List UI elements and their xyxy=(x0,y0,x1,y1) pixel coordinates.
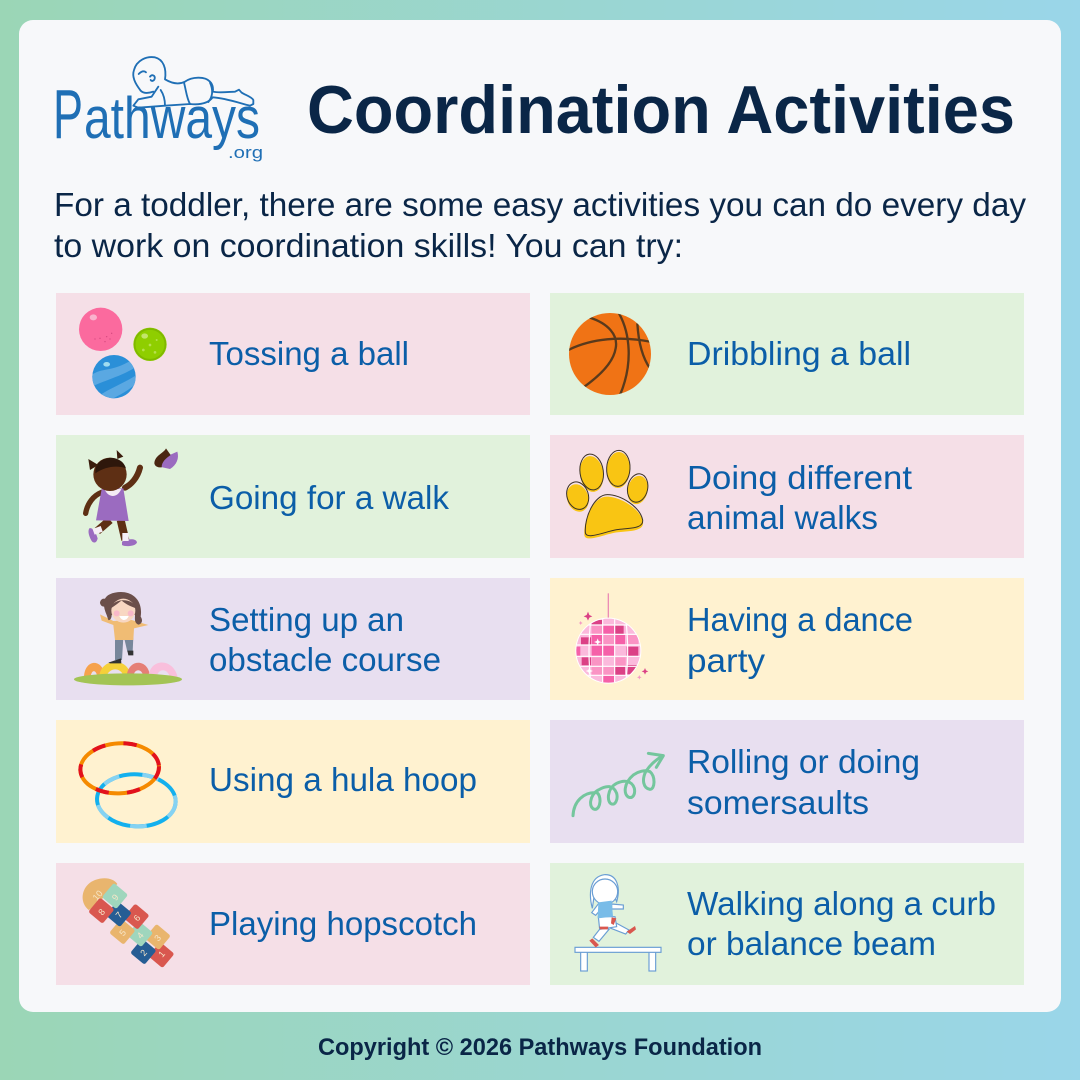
label xyxy=(209,601,441,678)
icon: girl on balance beam xyxy=(575,875,661,971)
footer copyright: Copyright © 2026 Pathways Foundation xyxy=(318,1034,762,1061)
card: dance party xyxy=(550,578,1024,700)
title: Coordination Activities xyxy=(307,72,1015,148)
label: Setting up an xyxy=(209,601,404,638)
icon: hopscotch: 7 xyxy=(114,910,124,920)
icon: hopscotch: 1 xyxy=(156,949,167,959)
label xyxy=(687,885,996,962)
logo: Pathways.org xyxy=(53,57,263,162)
card: hula hoop xyxy=(56,720,530,843)
label: or balance beam xyxy=(687,925,936,962)
label: Going for a walk xyxy=(209,479,449,516)
card: obstacle course xyxy=(56,578,530,700)
icon: disco ball xyxy=(575,593,648,685)
card: going for a walk xyxy=(56,435,530,558)
icon: spiral arrow xyxy=(573,753,663,816)
card: animal walks xyxy=(550,435,1024,558)
icon: two hula hoops xyxy=(79,741,177,828)
card: balance beam xyxy=(550,863,1024,985)
label: Dribbling a ball xyxy=(687,335,911,372)
label: Using a hula hoop xyxy=(209,761,477,798)
label: animal walks xyxy=(687,499,878,536)
label: Playing hopscotch xyxy=(209,905,477,942)
icon: hopscotch: 9 xyxy=(110,892,121,903)
icon: hopscotch: 5 xyxy=(117,928,128,938)
icon: hopscotch: 6 xyxy=(132,913,142,923)
icon: girl and butterfly xyxy=(86,448,178,546)
label: obstacle course xyxy=(209,641,441,678)
icon: hopscotch: 4 xyxy=(135,930,146,941)
label: Rolling or doing xyxy=(687,743,920,780)
label xyxy=(687,743,920,821)
label: Tossing a ball xyxy=(209,335,409,372)
icon: paw print xyxy=(563,450,650,538)
label: Walking along a curb xyxy=(687,885,996,922)
intro text: to work on coordination skills! You can try: xyxy=(54,227,683,264)
logo: Pathways.org: P xyxy=(53,75,83,153)
icon: hopscotch: 3 xyxy=(152,933,163,943)
intro text: For a toddler, there are some easy activities you can do every day xyxy=(54,186,1026,223)
icon: basketball xyxy=(568,313,651,395)
card: somersaults xyxy=(550,720,1024,843)
intro text xyxy=(54,186,1026,264)
icon: girl on rainbow obstacles xyxy=(74,592,182,685)
label: party xyxy=(687,642,766,679)
label: Doing different xyxy=(687,459,912,496)
label: Having a dance xyxy=(687,601,913,638)
card: hopscotch xyxy=(56,863,530,985)
label xyxy=(687,601,913,679)
icon: hopscotch: 8 xyxy=(96,907,107,917)
icon: three balls xyxy=(79,308,167,400)
logo: Pathways.org: athways xyxy=(84,86,260,151)
logo: Pathways.org: .org xyxy=(228,143,263,162)
icon: hopscotch: 2 xyxy=(138,948,149,958)
label: somersaults xyxy=(687,784,869,821)
card: dribbling a ball xyxy=(550,293,1024,415)
card: tossing a ball xyxy=(56,293,530,415)
icon: hopscotch: 10 xyxy=(91,888,105,902)
icon: hopscotch xyxy=(83,878,174,968)
label xyxy=(687,459,912,536)
